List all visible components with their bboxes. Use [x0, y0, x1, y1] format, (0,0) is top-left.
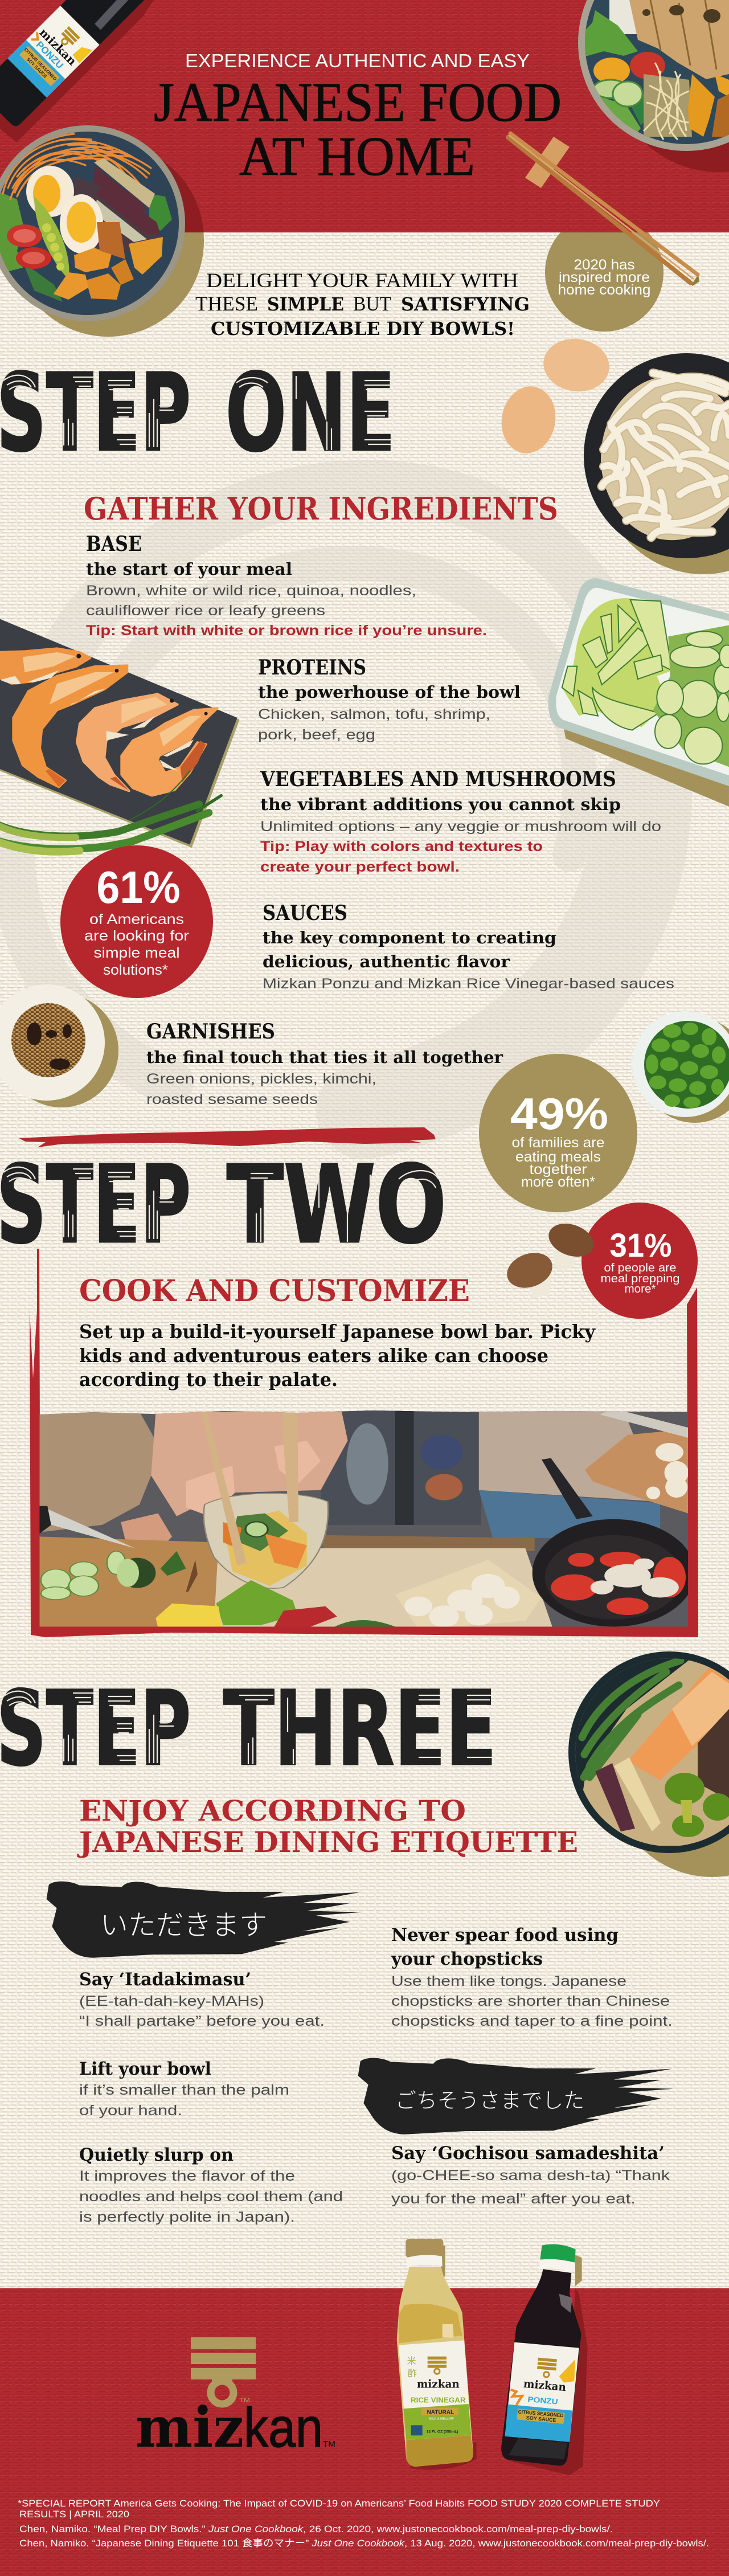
text block: quietly slurp on — [79, 2145, 343, 2225]
stat: 61 percent — [60, 845, 213, 998]
text block: lift your bowl: of your hand. — [79, 2103, 182, 2119]
text block: proteins: the powerhouse of the bowl — [258, 682, 521, 702]
footnotes — [18, 2498, 709, 2549]
text block: vegetables and mushrooms: Tip: Play with colors and textures to — [260, 839, 543, 854]
salmon — [628, 1667, 729, 1780]
icon: rice vinegar bottle: mizkan — [417, 2378, 460, 2391]
basket of mushrooms — [395, 1560, 542, 1630]
text block: garnishes: Green onions, pickles, kimchi, — [146, 1071, 376, 1087]
text block: quietly slurp on: noodles and helps cool them (and — [79, 2189, 343, 2205]
icon: rice vinegar bottle: RICE VINEGAR — [411, 2395, 466, 2404]
heading: step three: THREE — [223, 1670, 497, 1789]
text block: never spear food: Use them like tongs. Japanese — [391, 1973, 626, 1989]
panel: step two frame — [30, 1249, 698, 1637]
stat: 61 percent: 61% — [97, 862, 180, 913]
stat: 49 percent — [479, 1054, 637, 1212]
footer red band — [0, 2288, 729, 2576]
squash — [688, 74, 715, 137]
olive circle behind left bowl — [42, 232, 204, 337]
text block: lift your bowl: if it’s smaller than the palm — [79, 2082, 289, 2098]
sweet potato — [94, 158, 155, 208]
pea pod — [34, 197, 69, 279]
tomatoes — [593, 58, 630, 84]
stat: 49 percent: 49% — [510, 1089, 608, 1139]
heading: step two: TWO — [227, 1143, 447, 1267]
dark centre — [74, 177, 159, 251]
intro text: delight your family: SIMPLE — [267, 293, 344, 315]
callout: 2020 has inspired more home cooking — [545, 232, 664, 332]
text block: lift your bowl — [79, 2059, 289, 2119]
stat: 31 percent with mushrooms — [502, 1203, 698, 1319]
red brush stroke divider — [19, 1127, 436, 1147]
text block: build it yourself bowl bar — [79, 1320, 596, 1391]
text block: never spear food: chopsticks and taper to a fine point. — [391, 2013, 673, 2029]
heading: step two: STEP — [0, 1143, 191, 1267]
stat: 61 percent: are looking for — [84, 928, 189, 944]
cucumbers — [41, 1551, 125, 1600]
callout: 2020 has inspired more home cooking: home cooking — [558, 282, 650, 298]
text block: proteins — [258, 656, 521, 743]
icon: rice vinegar bottle: 米 — [407, 2353, 416, 2367]
left cutting board — [39, 1536, 219, 1627]
child pink shirt — [151, 1412, 348, 1516]
stat: 49 percent: more often* — [521, 1174, 595, 1190]
text block: vegetables and mushrooms: create your perfect bowl. — [260, 859, 460, 875]
icon: cucumber container — [548, 578, 729, 807]
icon: ponzu bottle top left: SOY SAUCE — [26, 56, 48, 80]
stat: 31 percent with mushrooms: more* — [624, 1283, 656, 1295]
wooden spoons — [201, 1412, 247, 1565]
text block: base: Brown, white or wild rice, quinoa, noodles, — [86, 583, 416, 599]
window background — [321, 1409, 481, 1525]
stat: 61 percent: of Americans — [89, 911, 184, 927]
icon: chopsticks on wooden rest — [508, 133, 699, 286]
text block: say gochisou samadeshita: Say ‘Gochisou samadeshita’ — [391, 2143, 665, 2164]
text block: vegetables and mushrooms: the vibrant additions you cannot skip — [260, 795, 621, 814]
text block: never spear food — [391, 1925, 673, 2029]
title — [154, 50, 562, 187]
text block: garnishes: roasted sesame seeds — [146, 1091, 318, 1107]
icon: salmon bowl — [568, 1651, 729, 1877]
icon: ponzu bottle: PONZU — [527, 2395, 558, 2406]
text block: say itadakimasu: (EE-tah-dah-key-MAHs) — [79, 1993, 264, 2009]
footnotes: *SPECIAL REPORT America Gets Cooking: The Impact of COVID-19 on Americans’ Food Habits FOOD STUDY 2020 COMPLETE STUDY — [18, 2498, 660, 2509]
text block: base: the start of your meal — [86, 559, 292, 579]
carrot shreds — [3, 134, 151, 199]
text block: sauces — [263, 901, 674, 992]
icon: rice vinegar bottle: MILD & MELLOW — [429, 2417, 454, 2420]
icon: ponzu bottle — [501, 2244, 588, 2475]
intro text: delight your family — [195, 269, 530, 340]
text block: proteins: Chicken, salmon, tofu, shrimp, — [258, 706, 490, 722]
icon: edamame bowl — [632, 1011, 729, 1123]
text block: build it yourself bowl bar: Set up a build-it-yourself Japanese bowl bar. Picky — [79, 1320, 596, 1343]
icon: sesame sauce dish — [0, 984, 118, 1107]
icon: left food bowl — [0, 125, 185, 321]
cucumber — [593, 80, 628, 98]
text block: say itadakimasu: Say ‘Itadakimasu’ — [79, 1969, 251, 1990]
brush label: itadakimasu — [47, 1882, 362, 1958]
icon: ponzu bottle top left: mizkan — [36, 26, 79, 68]
intro text: delight your family: CUSTOMIZABLE DIY BOWLS! — [211, 318, 515, 340]
broccoli — [665, 1773, 729, 1837]
text block: garnishes: GARNISHES — [146, 1020, 275, 1044]
icon: ponzu bottle: mizkan — [523, 2377, 567, 2394]
icon: shrimp on slate — [0, 619, 240, 848]
left person shirt — [39, 1412, 155, 1532]
callout: 2020 has inspired more home cooking: 2020 has — [574, 257, 634, 273]
text block: build it yourself bowl bar: according to their palate. — [79, 1368, 338, 1391]
title: EXPERIENCE AUTHENTIC AND EASY — [185, 50, 530, 71]
icon: upper right food bowl — [578, 0, 729, 151]
cucumber slices — [653, 625, 729, 767]
peppers — [216, 1580, 297, 1625]
icon: rice vinegar bottle: 12 FL OZ (355mL) — [427, 2430, 458, 2434]
text block: sauces: the key component to creating — [263, 928, 556, 947]
shrimp two — [13, 665, 127, 787]
brush label: gochisou samadeshita: ごちそうさまでした — [395, 2083, 584, 2114]
stat: 49 percent: together — [530, 1162, 587, 1177]
title: JAPANESE FOOD — [154, 72, 562, 133]
stat: 31 percent with mushrooms: 31% — [609, 1227, 672, 1264]
section heading: enjoy according to japanese dining etiquette: ENJOY ACCORDING TO — [79, 1794, 466, 1827]
text block: say gochisou samadeshita: you for the meal” after you eat. — [391, 2191, 636, 2207]
text block: proteins: PROTEINS — [258, 656, 366, 680]
text block: lift your bowl: Lift your bowl — [79, 2059, 211, 2079]
icon: green onion — [0, 771, 221, 852]
logo: mizkan: TM — [239, 2397, 250, 2404]
logo: mizkan: TM — [323, 2439, 335, 2449]
text block: quietly slurp on: Quietly slurp on — [79, 2145, 234, 2165]
section heading: enjoy according to japanese dining etiquette — [77, 1794, 578, 1859]
section heading: gather your ingredients: GATHER YOUR INGREDIENTS — [84, 490, 558, 527]
icon: ponzu bottle top left: PONZU — [34, 39, 65, 71]
text block: sauces: Mizkan Ponzu and Mizkan Rice Vinegar-based sauces — [263, 976, 674, 992]
text block: never spear food: Never spear food using — [391, 1925, 619, 1945]
text block: garnishes — [146, 1020, 503, 1107]
title: AT HOME — [239, 126, 475, 187]
intro text: delight your family: SATISFYING — [401, 293, 530, 315]
icon: ponzu bottle: SOY SAUCE — [526, 2415, 556, 2423]
text block: say itadakimasu — [79, 1969, 325, 2029]
back counter strip — [321, 1535, 535, 1551]
sweet potatoes — [595, 1763, 635, 1831]
text block: vegetables and mushrooms: Unlimited options – any veggie or mushroom will do — [260, 819, 661, 835]
logo: mizkan — [136, 2337, 335, 2460]
heading: step two — [0, 1143, 447, 1267]
text block: never spear food: your chopsticks — [391, 1949, 543, 1969]
text block: quietly slurp on: is perfectly polite in Japan). — [79, 2209, 295, 2225]
text block: proteins: pork, beef, egg — [258, 727, 375, 743]
shadows of header bowls on red — [0, 0, 729, 232]
text block: garnishes: the final touch that ties it all together — [146, 1048, 503, 1067]
brush label: itadakimasu: いただきます — [100, 1903, 267, 1943]
shrimp one — [0, 648, 90, 684]
pan — [542, 1458, 593, 1519]
stat: 61 percent: solutions* — [103, 962, 168, 978]
knife — [41, 1506, 135, 1548]
icon: ponzu bottle top left: CITRUS SEASONED — [23, 47, 58, 81]
footnotes: Chen, Namiko. “Meal Prep DIY Bowls.” Just One Cookbook , 26 Oct. 2020, www.justonecookbook.com/meal-prep-diy-bowls/. — [19, 2524, 613, 2534]
icon: rice vinegar bottle: NATURAL — [427, 2409, 454, 2415]
chicken — [629, 0, 729, 79]
stat: 61 percent: simple meal — [93, 945, 180, 961]
intro text: delight your family: DELIGHT YOUR FAMILY WITH — [206, 269, 518, 292]
icon: rice vinegar bottle — [397, 2239, 477, 2470]
glass bowl with salad — [204, 1493, 328, 1588]
squash cubes — [129, 237, 163, 275]
mushrooms — [698, 1709, 729, 1800]
tomatoes — [7, 224, 42, 247]
icon: eggs — [496, 334, 613, 457]
text block: vegetables and mushrooms — [260, 767, 661, 875]
intro text: delight your family: BUT — [353, 292, 391, 315]
section heading: cook and customize: COOK AND CUSTOMIZE — [79, 1274, 470, 1309]
text block: never spear food: chopsticks are shorter than Chinese — [391, 1993, 670, 2009]
icon: noodle bowl — [584, 353, 729, 574]
stat: 49 percent: of families are — [511, 1135, 605, 1151]
logo: mizkan: kan — [244, 2397, 323, 2459]
icon: ponzu bottle: CITRUS SEASONED — [518, 2409, 564, 2418]
counter — [204, 1548, 553, 1630]
shrimp three — [77, 694, 178, 791]
header red band — [0, 0, 729, 232]
callout: 2020 has inspired more home cooking: inspired more — [559, 269, 650, 285]
text block: base — [86, 532, 487, 639]
stat: 49 percent: eating meals — [515, 1149, 601, 1165]
text block: base: BASE — [86, 532, 142, 556]
shrimp four — [121, 708, 218, 796]
hands — [186, 1465, 235, 1516]
heading: step three: STEP — [0, 1670, 191, 1789]
eggs — [26, 166, 74, 217]
text block: vegetables and mushrooms: VEGETABLES AND MUSHROOMS — [260, 767, 616, 791]
text block: quietly slurp on: It improves the flavor of the — [79, 2168, 295, 2184]
intro text: delight your family: THESE — [195, 292, 258, 315]
photo: family cooking in the kitchen — [39, 1409, 695, 1630]
text block: say gochisou samadeshita — [391, 2143, 670, 2207]
footnotes: RESULTS | APRIL 2020 — [19, 2509, 129, 2520]
cucumber ribbons — [562, 598, 672, 727]
footnotes: Chen, Namiko. “Japanese Dining Etiquette 101 食事のマナー” Just One Cookbook , 13 Aug. 2020, www.justonecookbook.com/meal-prep-diy-bowls/. — [19, 2538, 709, 2549]
stat: 31 percent with mushrooms: meal prepping — [600, 1273, 680, 1285]
bean sprouts — [644, 74, 692, 137]
right person shirt and jeans — [479, 1409, 660, 1502]
logo: mizkan: miz — [136, 2395, 244, 2460]
lettuce and greens — [0, 191, 24, 273]
brush label: gochisou samadeshita — [358, 2058, 673, 2135]
heading: step one: STEP — [0, 351, 191, 476]
icon: rice vinegar bottle: 酢 — [408, 2366, 417, 2379]
text block: base: Tip: Start with white or brown rice if you’re unsure. — [86, 623, 487, 639]
heading: step three — [0, 1670, 497, 1789]
green beans — [582, 1661, 681, 1777]
text block: base: cauliflower rice or leafy greens — [86, 603, 325, 619]
background: enso brush swirl — [11, 485, 647, 1111]
section heading: enjoy according to japanese dining etiquette: JAPANESE DINING ETIQUETTE — [77, 1825, 578, 1859]
text block: sauces: SAUCES — [263, 901, 347, 925]
stat: 31 percent with mushrooms: of people are — [604, 1262, 677, 1274]
icon: mushrooms — [502, 1218, 599, 1299]
lettuce — [581, 10, 638, 57]
icon: ponzu bottle top left — [0, 0, 164, 129]
text block: build it yourself bowl bar: kids and adventurous eaters alike can choose — [79, 1344, 548, 1367]
heading: step one: ONE — [226, 351, 395, 476]
text block: sauces: delicious, authentic flavor — [263, 952, 510, 971]
text block: say gochisou samadeshita: (go-CHEE-so sama desh-ta) “Thank — [391, 2168, 670, 2184]
right cutting board with mushrooms — [585, 1429, 688, 1514]
text block: say itadakimasu: “I shall partake” before you eat. — [79, 2013, 325, 2029]
